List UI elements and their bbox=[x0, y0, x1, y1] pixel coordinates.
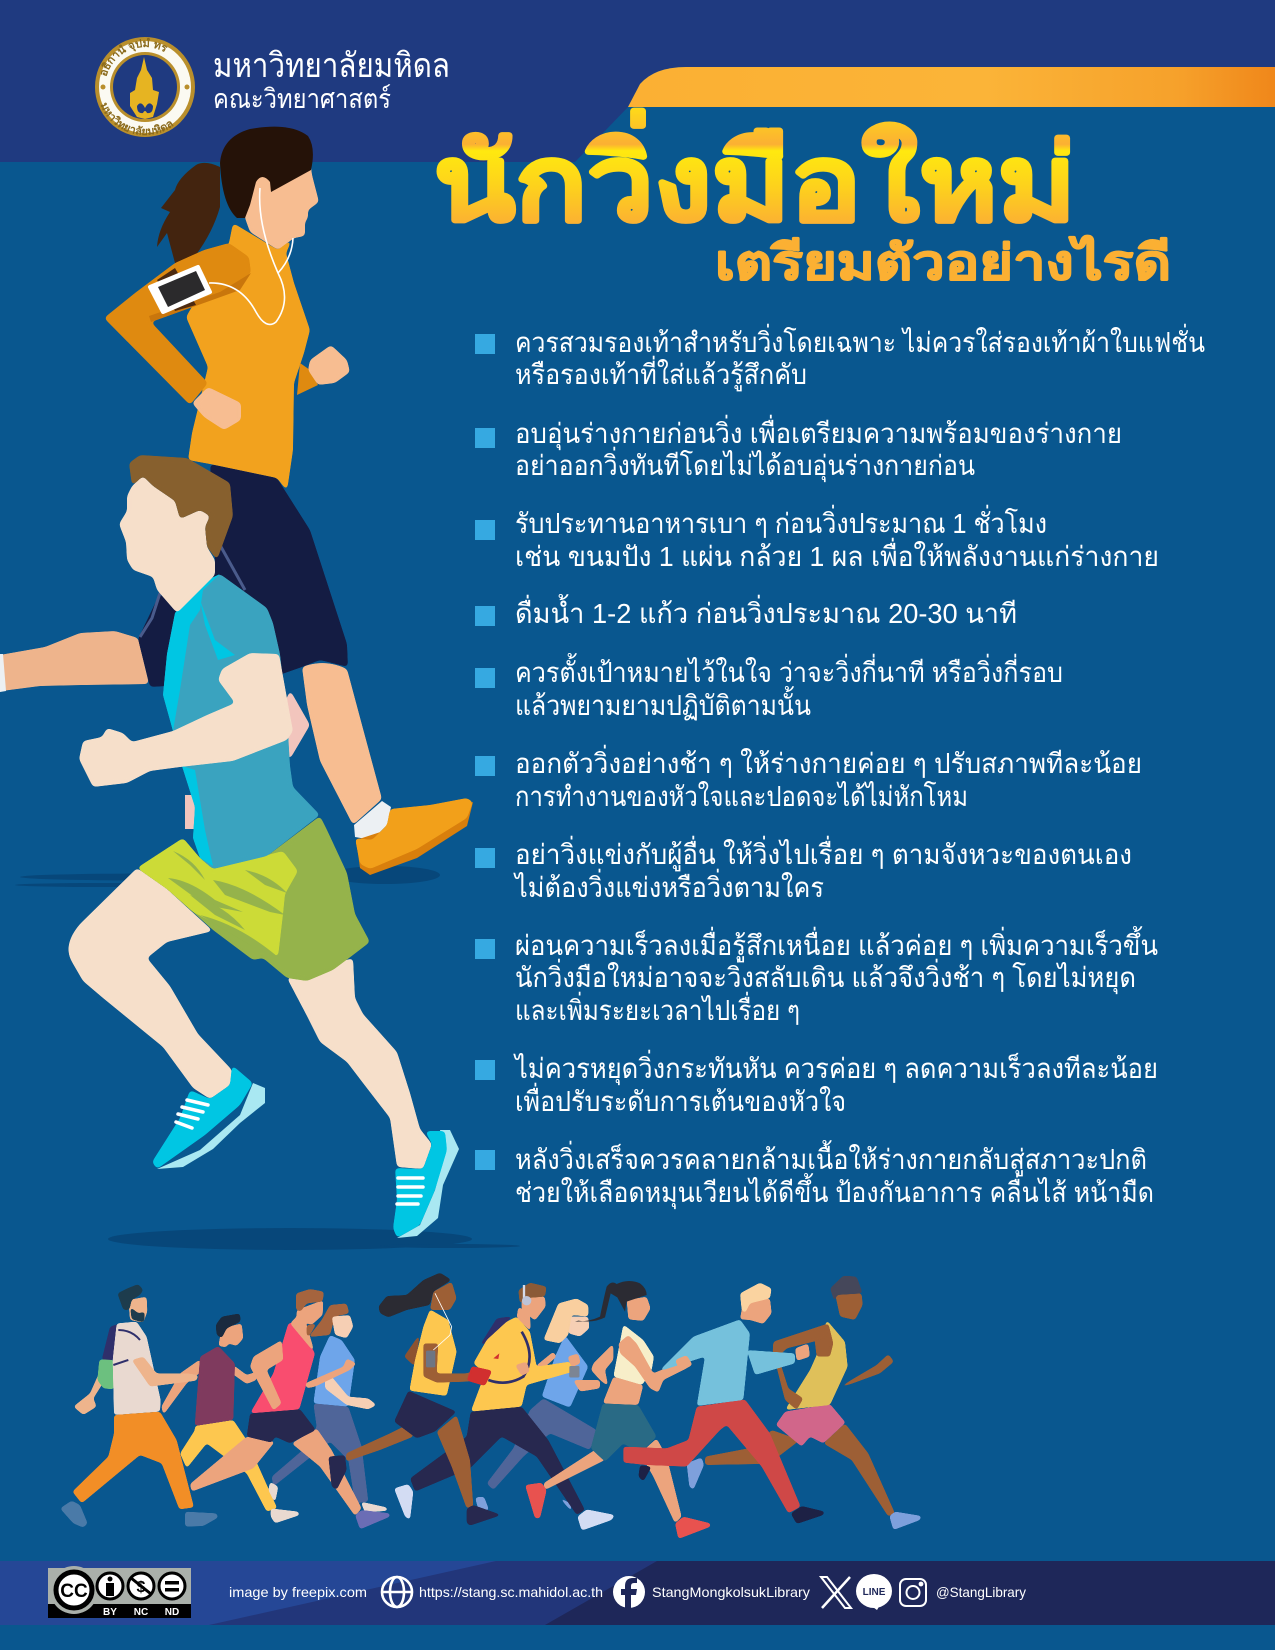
Creative Commons licence badge: CC bbox=[60, 1581, 88, 1602]
forearm sleeve bbox=[297, 363, 318, 395]
subtitle: เตรียมตัวอย่างไรดี bbox=[715, 234, 1171, 290]
tip 8: ผ่อนความเร็วลงเมื่อรู้สึกเหนื่อย แล้วค่อย ๆ เพิ่มความเร็วขึ้น bbox=[515, 926, 1158, 963]
front lower leg bbox=[302, 663, 382, 825]
heading: university name: คณะวิทยาศาสตร์ bbox=[213, 83, 391, 114]
runner: man with yellow trousers bbox=[140, 1313, 300, 1523]
illustration: woman runner bbox=[0, 127, 473, 875]
tip 7: อย่าวิ่งแข่งกับผู้อื่น ให้วิ่งไปเรื่อย ๆ ตามจังหวะของตนเอง bbox=[515, 836, 1132, 872]
back of thigh bbox=[270, 690, 310, 759]
tip 5: ควรตั้งเป้าหมายไว้ในใจ ว่าจะวิ่งกี่นาที หรือวิ่งกี่รอบ bbox=[515, 653, 1063, 688]
tip 9: ไม่ควรหยุดวิ่งกระทันหัน ควรค่อย ๆ ลดความเร็วลงทีละน้อย bbox=[513, 1050, 1158, 1086]
Creative Commons licence badge: $ bbox=[137, 1579, 146, 1596]
icon: facebook bbox=[613, 1576, 645, 1608]
tip 1 bbox=[475, 324, 1205, 392]
runner: man in pink bbox=[190, 1289, 390, 1529]
runner: blonde woman in blue bbox=[475, 1298, 600, 1513]
tip 5 bbox=[475, 653, 1063, 721]
sock bbox=[354, 801, 391, 840]
shirt accent bbox=[163, 574, 235, 866]
tip 1: หรือรองเท้าที่ใส่แล้วรู้สึกคับ bbox=[515, 356, 807, 392]
tip 5: แล้วพยามยามปฏิบัติตามนั้น bbox=[515, 686, 811, 721]
neck and face bbox=[240, 160, 319, 250]
icon: globe bbox=[382, 1577, 412, 1607]
heading: university name: มหาวิทยาลัยมหิดล bbox=[213, 47, 450, 85]
tip 2 bbox=[475, 415, 1122, 483]
tip 1: ควรสวมรองเท้าสำหรับวิ่งโดยเฉพาะ ไม่ควรใส่รองเท้าผ้าใบแฟชั่น bbox=[515, 324, 1205, 358]
icon: LINE bbox=[856, 1574, 892, 1610]
runner: blonde man in red trousers bbox=[623, 1283, 825, 1524]
tip 9 bbox=[475, 1050, 1158, 1117]
runner: woman in blue bbox=[268, 1303, 388, 1513]
header band bbox=[0, 0, 1275, 162]
tip 8 bbox=[475, 926, 1158, 1026]
phone bbox=[150, 267, 210, 312]
front leg bbox=[68, 868, 232, 1099]
tips list bbox=[475, 324, 1205, 1210]
tip 8: และเพิ่มระยะเวลาไปเรื่อย ๆ bbox=[515, 992, 800, 1026]
tip 2: อย่าออกวิ่งทันทีโดยไม่ได้อบอุ่นร่างกายก่อน bbox=[515, 447, 975, 483]
back leg bbox=[287, 958, 432, 1169]
tip 6 bbox=[475, 745, 1142, 812]
footer band bbox=[0, 1561, 1275, 1625]
icon: X bbox=[821, 1577, 851, 1608]
armband bbox=[157, 268, 196, 311]
illustration: crowd of runners, right bbox=[410, 1276, 922, 1539]
head bbox=[119, 476, 215, 613]
runner: woman in yellow top bbox=[328, 1273, 477, 1520]
upper arm bbox=[104, 243, 251, 405]
tip 10 bbox=[475, 1140, 1154, 1210]
credit: image source: image by freepix.com bbox=[229, 1584, 367, 1600]
left shoe bbox=[152, 1065, 265, 1169]
tip 10: หลังวิ่งเสร็จควรคลายกล้ามเนื้อให้ร่างกายกลับสู่สภาวะปกติ bbox=[515, 1140, 1147, 1177]
fist bbox=[308, 345, 350, 385]
arm bbox=[79, 653, 293, 787]
earphone cable bbox=[209, 188, 293, 324]
heading: university name bbox=[213, 47, 450, 114]
ground shadows bbox=[15, 866, 520, 1250]
tip 6: ออกตัววิ่งอย่างช้า ๆ ให้ร่างกายค่อย ๆ ปรับสภาพทีละน้อย bbox=[515, 745, 1142, 779]
Creative Commons licence badge: NC bbox=[134, 1607, 148, 1618]
title: นักวิ่งมือใหม่ bbox=[434, 109, 1076, 243]
Creative Commons licence badge bbox=[48, 1566, 191, 1618]
runner: woman in yellow top, front leg bbox=[437, 1415, 502, 1526]
tip 8: นักวิ่งมือใหม่อาจจะวิ่งสลับเดิน แล้วจึงวิ่งช้า ๆ โดยไม่หยุด bbox=[515, 959, 1136, 995]
logo: Mahidol University seal: อธิกานํ จุปมํ ทร bbox=[101, 38, 168, 76]
hand on hip bbox=[192, 387, 241, 430]
runner: woman with ponytail bbox=[525, 1281, 711, 1539]
Creative Commons licence badge: ND bbox=[165, 1607, 179, 1618]
tip 6: การทำงานของหัวใจและปอดจะได้ไม่หักโหม bbox=[515, 781, 968, 812]
orange accent bar bbox=[628, 67, 1275, 107]
runner: dark-skinned man in vest bbox=[687, 1276, 922, 1530]
runner: man in yellow jacket bbox=[410, 1283, 615, 1531]
Creative Commons licence badge: BY bbox=[103, 1607, 117, 1618]
tip 2: อบอุ่นร่างกายก่อนวิ่ง เพื่อเตรียมความพร้อมของร่างกาย bbox=[515, 415, 1122, 451]
icon: Instagram bbox=[900, 1579, 926, 1606]
hair bbox=[129, 455, 233, 560]
tip 4: ดื่มน้ำ 1-2 แก้ว ก่อนวิ่งประมาณ 20-30 นาที bbox=[515, 594, 1017, 629]
ponytail bbox=[157, 163, 220, 263]
illustration: male runner bbox=[68, 455, 459, 1238]
logo: Mahidol University seal: มหาวิทยาลัยมหิดล bbox=[100, 102, 174, 136]
right shoe bbox=[393, 1130, 459, 1238]
facebook page name: StangMongkolsukLibrary bbox=[652, 1584, 810, 1600]
website address: https://stang.sc.mahidol.ac.th bbox=[419, 1584, 603, 1600]
tip 3: เช่น ขนมปัง 1 แผ่น กล้วย 1 ผล เพื่อให้พลังงานแก่ร่างกาย bbox=[515, 538, 1159, 572]
tip 7 bbox=[475, 836, 1132, 903]
shirt torso bbox=[186, 223, 310, 491]
social handle: @StangLibrary bbox=[936, 1584, 1026, 1600]
icon: LINE: LINE bbox=[863, 1587, 886, 1598]
logo: Mahidol University seal bbox=[95, 37, 195, 137]
tip 3: รับประทานอาหารเบา ๆ ก่อนวิ่งประมาณ 1 ชั่วโมง bbox=[515, 505, 1047, 539]
illustration: crowd of runners, left bbox=[60, 1273, 477, 1529]
hair bbox=[220, 127, 313, 218]
tip 10: ช่วยให้เลือดหมุนเวียนได้ดีขึ้น ป้องกันอาการ คลื่นไส้ หน้ามืด bbox=[515, 1173, 1154, 1210]
shorts bbox=[137, 816, 370, 981]
runner: bearded man with backpack bbox=[60, 1284, 218, 1528]
shorts streaks bbox=[168, 851, 287, 957]
shorts side strap bbox=[140, 545, 245, 637]
rear leg bbox=[0, 631, 149, 692]
shirt bbox=[163, 574, 320, 869]
tip 9: เพื่อปรับระดับการเต้นของหัวใจ bbox=[515, 1083, 846, 1117]
shorts highlight bbox=[137, 838, 298, 957]
orange shoe bbox=[355, 798, 473, 875]
shorts bbox=[138, 464, 348, 687]
tip 3 bbox=[475, 505, 1159, 572]
tip 7: ไม่ต้องวิ่งแข่งหรือวิ่งตามใคร bbox=[513, 869, 824, 903]
